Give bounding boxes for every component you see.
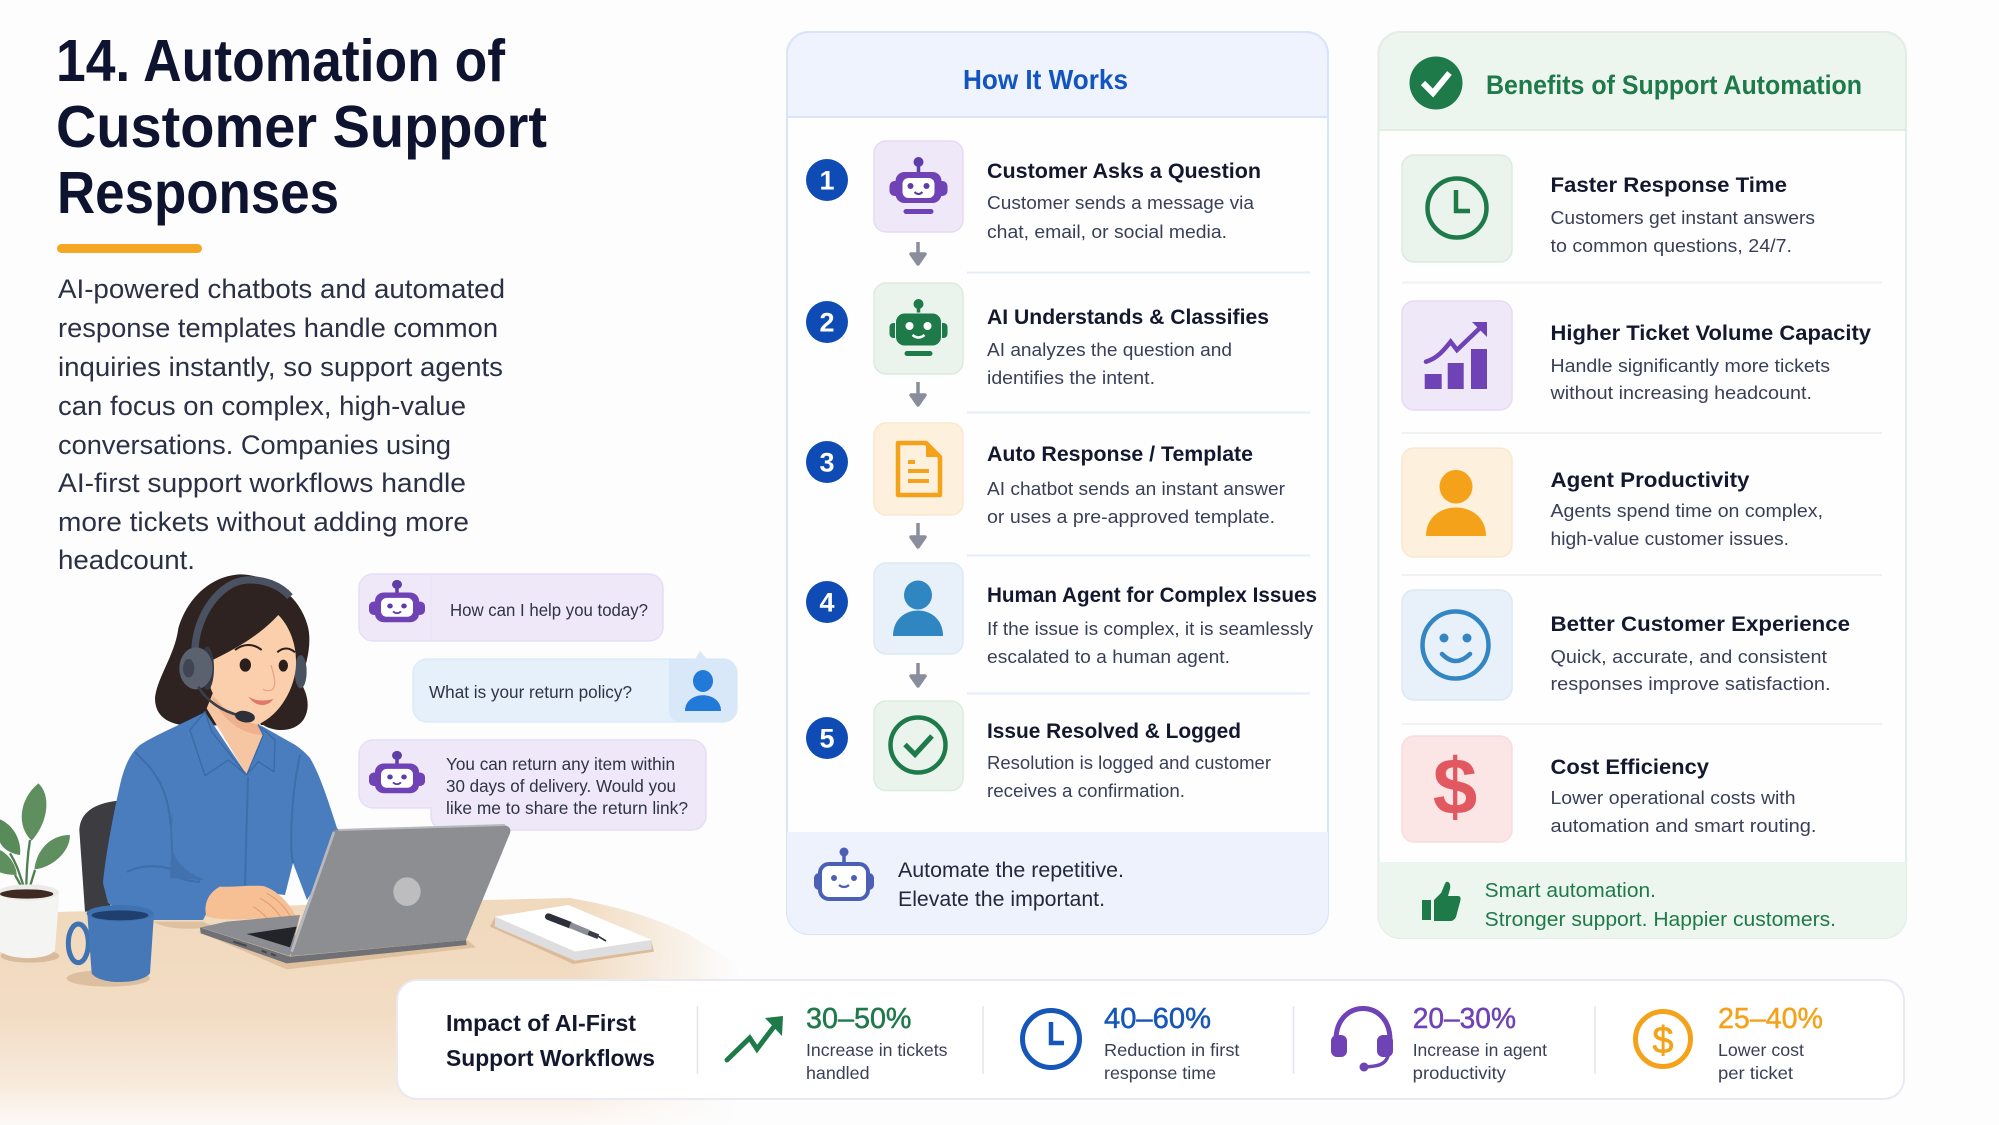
benefit: cost efficiency: Lower operational costs with <box>1550 787 1796 808</box>
illustration: support agent at desk <box>0 574 800 1125</box>
step 1: chat, email, or social media. <box>987 221 1227 242</box>
face <box>211 615 296 724</box>
intro paragraph <box>58 274 505 575</box>
step 5: receives a confirmation. <box>987 780 1185 801</box>
benefit: ticket volume: Higher Ticket Volume Capacity <box>1550 321 1871 345</box>
footer callout: Elevate the important. <box>898 888 1105 911</box>
step 4: If the issue is complex, it is seamlessly <box>987 618 1314 639</box>
facial features <box>235 645 295 705</box>
benefit: cost efficiency: Cost Efficiency <box>1550 755 1709 779</box>
step 2: 2 <box>819 308 835 338</box>
benefit: faster response: Customers get instant answers <box>1550 207 1815 228</box>
benefit: agent productivity <box>1402 448 1823 557</box>
intro paragraph: AI-first support workflows handle <box>58 468 466 498</box>
benefit: customer experience: Quick, accurate, and consistent <box>1550 646 1827 667</box>
arrow 3 to 4 <box>911 523 925 547</box>
step 3 <box>806 423 1285 527</box>
benefit: cost efficiency: automation and smart routing. <box>1550 815 1816 836</box>
icon: growth chart <box>1402 301 1512 410</box>
step 2: AI Understands & Classifies <box>987 305 1269 329</box>
stat: first response time: 40–60% <box>1104 1003 1211 1035</box>
step 4 <box>806 563 1317 667</box>
benefit: agent productivity: Agents spend time on complex, <box>1550 500 1823 521</box>
intro paragraph: more tickets without adding more <box>58 507 469 537</box>
chat bubble: bot answer: like me to share the return link? <box>446 798 688 818</box>
benefit: cost efficiency <box>1402 736 1816 842</box>
footer callout: Stronger support. Happier customers. <box>1485 908 1836 931</box>
step 4: 4 <box>819 588 835 618</box>
icon: dollar coin <box>1636 1012 1690 1066</box>
icon: dollar <box>1402 736 1512 842</box>
laptop <box>198 825 510 969</box>
chair <box>79 801 118 912</box>
chat bubble: bot greeting: How can I help you today? <box>450 600 648 620</box>
step 5 <box>806 701 1271 801</box>
benefit: customer experience: Better Customer Experience <box>1550 612 1850 636</box>
stat: first response time: Reduction in first <box>1104 1040 1240 1060</box>
step 3: 3 <box>819 448 835 478</box>
step 2: identifies the intent. <box>987 367 1155 388</box>
stat: agent productivity <box>1331 1003 1547 1083</box>
step 4: escalated to a human agent. <box>987 646 1230 667</box>
impact heading: Support Workflows <box>446 1045 655 1071</box>
footer callout <box>787 832 1328 934</box>
benefit: agent productivity: high-value customer issues. <box>1550 528 1789 549</box>
icon: bot <box>369 580 425 622</box>
benefit: customer experience <box>1402 590 1850 700</box>
icon: trending arrow <box>727 1016 783 1060</box>
headset <box>179 580 290 724</box>
arrow 1 to 2 <box>911 242 925 264</box>
neck <box>207 692 264 775</box>
title: Responses <box>57 160 339 226</box>
header band <box>787 32 1328 117</box>
footer callout <box>1378 862 1906 938</box>
arrow 2 to 3 <box>911 382 925 405</box>
panel: benefits of support automation <box>1378 32 1906 938</box>
impact heading <box>446 1010 655 1071</box>
title: 14. Automation of <box>56 28 505 94</box>
step 3: Auto Response / Template <box>987 442 1253 466</box>
arrow 4 to 5 <box>911 663 925 686</box>
stat: tickets handled: Increase in tickets <box>806 1040 948 1060</box>
collar <box>190 712 247 776</box>
icon: dollar coin: $ <box>1652 1020 1674 1062</box>
icon: check badge <box>1410 56 1462 110</box>
icon: smiley <box>1402 590 1512 700</box>
stat: cost per ticket: per ticket <box>1718 1063 1793 1083</box>
footer callout: Smart automation. <box>1485 879 1656 902</box>
footer callout: Automate the repetitive. <box>898 859 1124 882</box>
step 4: Human Agent for Complex Issues <box>987 583 1317 607</box>
intro paragraph: response templates handle common <box>58 313 498 343</box>
step 1: Customer Asks a Question <box>987 159 1261 183</box>
notebook and pen <box>490 905 654 964</box>
chat bubble: customer question <box>413 651 737 722</box>
title <box>56 28 547 226</box>
stat: tickets handled <box>727 1003 948 1083</box>
benefit: faster response <box>1402 155 1815 262</box>
intro paragraph: headcount. <box>58 545 195 575</box>
step 5: 5 <box>819 724 835 754</box>
chat bubble: customer question: What is your return policy? <box>429 682 632 702</box>
icon: customer <box>685 670 721 711</box>
stat: agent productivity: 20–30% <box>1413 1003 1516 1035</box>
hand on keyboard <box>153 886 296 929</box>
stat: tickets handled: 30–50% <box>806 1003 912 1035</box>
header band: Benefits of Support Automation <box>1486 70 1862 100</box>
step 1: 1 <box>819 166 835 196</box>
benefit: faster response: to common questions, 24/7. <box>1550 235 1792 256</box>
agent <box>103 574 345 920</box>
title: Customer Support <box>56 94 547 160</box>
icon: clock <box>1402 155 1512 262</box>
header band: How It Works <box>963 64 1128 95</box>
impact heading: Impact of AI-First <box>446 1010 636 1036</box>
coffee mug <box>67 905 154 987</box>
stat: tickets handled: handled <box>806 1063 870 1083</box>
benefit: agent productivity: Agent Productivity <box>1550 468 1750 492</box>
step 5: Issue Resolved & Logged <box>987 719 1241 743</box>
step 5: Resolution is logged and customer <box>987 752 1271 773</box>
chat bubble: bot answer: You can return any item within <box>446 754 675 774</box>
stat: first response time <box>1022 1003 1240 1083</box>
icon: bot in purple tile <box>874 141 963 232</box>
intro paragraph: AI-powered chatbots and automated <box>58 274 505 304</box>
icon: person <box>1402 448 1512 557</box>
benefit: ticket volume: without increasing headcount. <box>1549 382 1812 403</box>
intro paragraph: inquiries instantly, so support agents <box>58 352 503 382</box>
icon: thumbs up <box>1422 882 1461 921</box>
icon: clock <box>1022 1010 1080 1068</box>
icon: human agent in blue tile <box>874 563 963 654</box>
icon: bot in green tile <box>874 283 963 374</box>
desk <box>0 890 800 1125</box>
stat: cost per ticket: Lower cost <box>1718 1040 1804 1060</box>
plant <box>0 783 70 963</box>
benefit: ticket volume <box>1402 301 1871 410</box>
panel: how it works <box>787 32 1328 934</box>
step 1: Customer sends a message via <box>987 192 1255 213</box>
icon: dollar: $ <box>1433 742 1477 831</box>
icon: bot <box>369 751 425 793</box>
step 3: AI chatbot sends an instant answer <box>987 478 1285 499</box>
step 2 <box>806 283 1269 388</box>
icon: bot <box>814 848 874 899</box>
chat bubble: bot greeting <box>359 574 663 641</box>
right ear cup <box>295 655 307 688</box>
stat: agent productivity: productivity <box>1413 1063 1506 1083</box>
stat: first response time: response time <box>1104 1063 1216 1083</box>
panel: impact of AI-first support workflows <box>397 980 1904 1099</box>
benefit: customer experience: responses improve satisfaction. <box>1550 673 1830 694</box>
title underline accent <box>57 244 202 253</box>
step 3: or uses a pre-approved template. <box>987 506 1275 527</box>
stat: cost per ticket <box>1636 1003 1823 1083</box>
step 1 <box>806 141 1261 242</box>
stat: cost per ticket: 25–40% <box>1718 1003 1823 1035</box>
icon: document in orange tile <box>874 423 963 515</box>
icon: check in green tile <box>874 701 963 790</box>
intro paragraph: can focus on complex, high-value <box>58 391 466 421</box>
stat: agent productivity: Increase in agent <box>1413 1040 1547 1060</box>
intro paragraph: conversations. Companies using <box>58 430 451 460</box>
header band <box>1378 32 1906 130</box>
benefit: faster response: Faster Response Time <box>1550 173 1787 197</box>
step 2: AI analyzes the question and <box>987 339 1232 360</box>
benefit: ticket volume: Handle significantly more tickets <box>1550 355 1830 376</box>
chat bubble: bot answer: 30 days of delivery. Would you <box>446 776 676 796</box>
icon: headset <box>1331 1008 1393 1072</box>
chat bubble: bot answer <box>359 740 706 830</box>
